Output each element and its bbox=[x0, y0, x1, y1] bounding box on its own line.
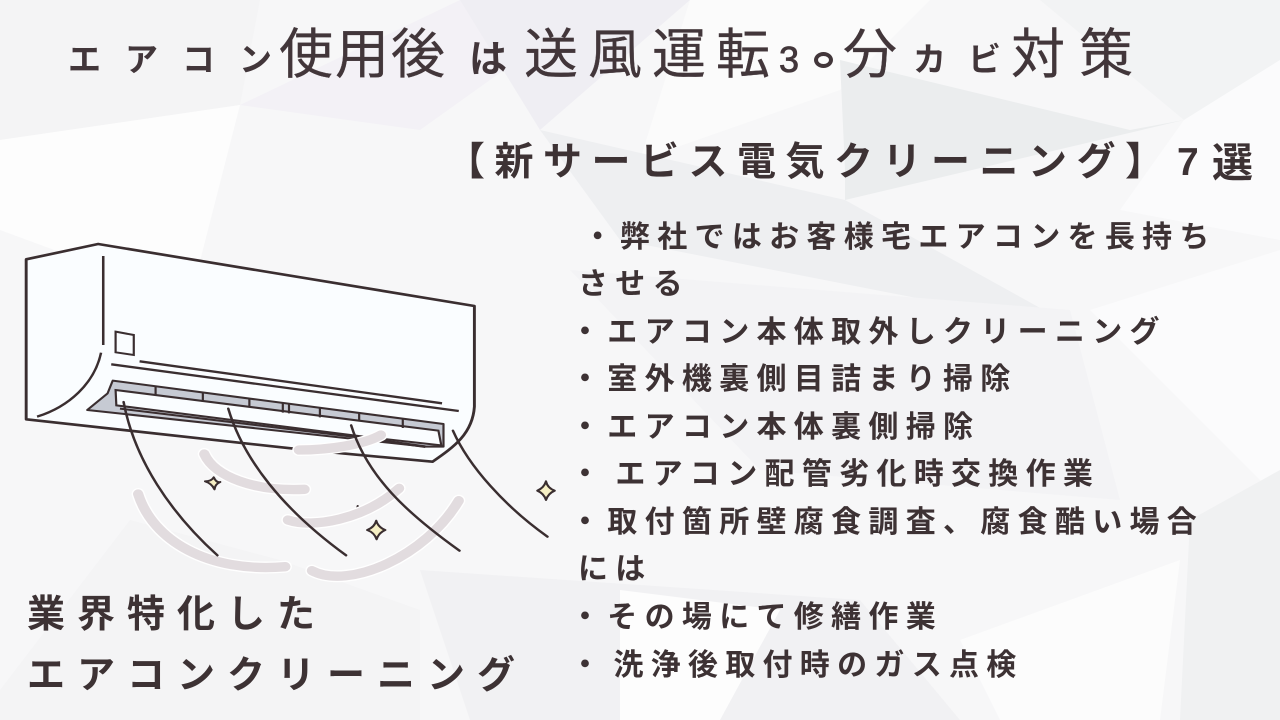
caption: 業界特化した bbox=[27, 594, 327, 636]
subtitle: 選 bbox=[1212, 140, 1253, 186]
title: 3 bbox=[779, 39, 799, 80]
subtitle: 7 bbox=[1177, 141, 1199, 184]
text block: service list: ・その場にて修繕作業 bbox=[570, 601, 943, 634]
text block: service list bbox=[570, 221, 1217, 682]
title: カビ bbox=[913, 41, 1023, 78]
title bbox=[68, 25, 1147, 85]
text block: service list: には bbox=[578, 553, 653, 586]
title: は bbox=[469, 39, 507, 81]
airflow lines bbox=[124, 402, 547, 555]
title: 対策 bbox=[1011, 25, 1147, 85]
unit body bbox=[26, 244, 474, 462]
caption: エアコンクリーニング bbox=[27, 655, 527, 697]
text block: service list: させる bbox=[578, 268, 690, 301]
text block: service list: ・弊社ではお客様宅エアコンを長持ち bbox=[583, 221, 1217, 254]
air vent bbox=[87, 381, 443, 447]
caption bbox=[27, 594, 527, 697]
text block: service list: ・エアコン本体裏側掃除 bbox=[570, 411, 980, 444]
text block: service list: ・洗浄後取付時のガス点検 bbox=[570, 649, 1024, 682]
airflow swooshes bbox=[138, 435, 459, 576]
text block: service list: ・ エアコン配管劣化時交換作業 bbox=[570, 458, 1100, 491]
title: 分 bbox=[843, 25, 897, 85]
text block: service list: ・取付箇所壁腐食調査、腐食酷い場合 bbox=[570, 506, 1204, 539]
sparkles bbox=[205, 477, 555, 539]
title: 使用後 bbox=[279, 25, 447, 85]
text block: service list: ・エアコン本体取外しクリーニング bbox=[570, 316, 1167, 349]
title: エアコン bbox=[68, 41, 296, 78]
title: 送風運転 bbox=[524, 25, 780, 85]
subtitle: 【新サービス電気クリーニング】 bbox=[446, 141, 1174, 184]
illustration: air conditioner bbox=[24, 242, 556, 582]
text block: service list: ・室外機裏側目詰まり掃除 bbox=[570, 363, 1018, 396]
